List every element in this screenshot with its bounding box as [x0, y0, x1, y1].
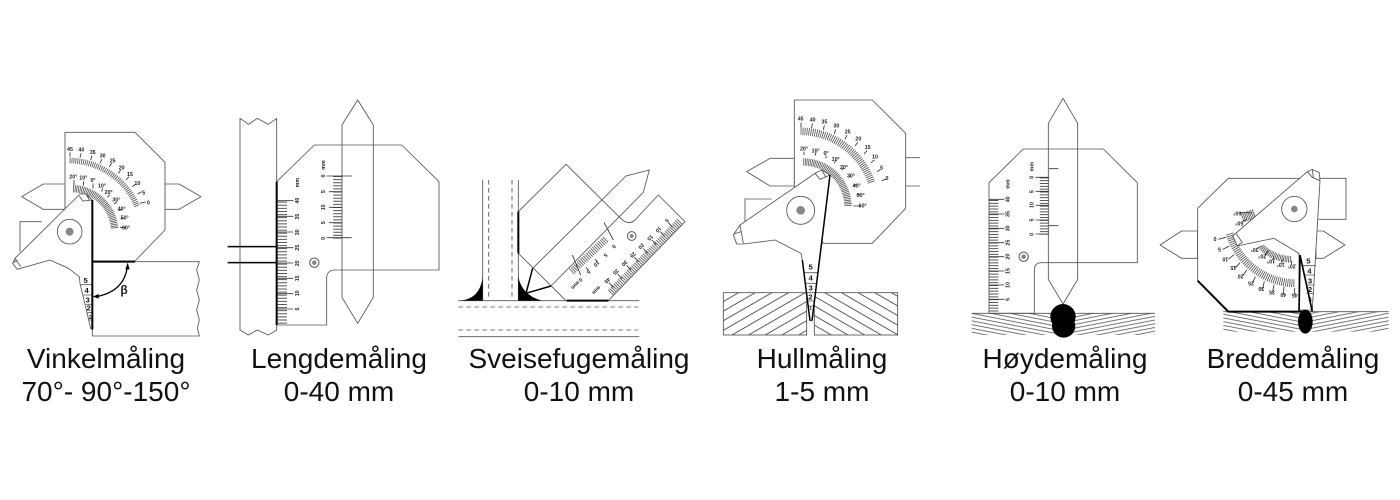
- left ruler numbers: 40: [1005, 196, 1011, 202]
- sliding blade: [342, 100, 373, 323]
- left ruler long ticks: [989, 199, 1004, 299]
- left ruler numbers: 25: [295, 245, 301, 251]
- scale numbers: [67, 147, 150, 231]
- wedge numbers: 1: [1309, 296, 1312, 301]
- left ruler long ticks: [278, 201, 293, 309]
- scale numbers: 10°: [812, 148, 820, 154]
- scale numbers: 10: [1222, 255, 1228, 261]
- left ruler numbers: 10: [1005, 282, 1011, 288]
- left ruler numbers: 5: [295, 307, 301, 310]
- panel: Sveisefugemåling: [458, 164, 690, 407]
- scale numbers: 45: [798, 117, 804, 123]
- outer degree scale: [70, 160, 137, 207]
- left ruler numbers: [1005, 179, 1011, 301]
- wedge numbers: [84, 276, 92, 321]
- screw head: [1291, 206, 1298, 212]
- scale numbers: 5: [142, 190, 145, 196]
- scale tick marks: [70, 152, 146, 227]
- left ruler numbers: [295, 178, 301, 310]
- workpiece left: [972, 313, 1063, 335]
- wedge numbers: 2: [87, 304, 91, 313]
- vertical plate centre lines: [489, 180, 512, 300]
- wedge numbers: [1306, 257, 1312, 301]
- right ruler numbers: 5: [1029, 218, 1035, 221]
- right pin: [906, 158, 920, 186]
- wedge numbers: 5: [1306, 257, 1311, 266]
- wedge numbers: 1: [89, 315, 92, 321]
- gauge body: [65, 132, 165, 261]
- outer degree scale: [801, 131, 872, 183]
- caption: 0-45 mm: [1238, 376, 1348, 407]
- left ruler numbers: 20: [295, 260, 301, 266]
- left ruler numbers: 40: [295, 198, 301, 204]
- inner ruler numbers: [569, 243, 617, 290]
- outer ruler numbers: 35: [611, 267, 620, 276]
- right ruler long ticks: [1036, 169, 1058, 234]
- scale numbers: 10: [872, 155, 878, 161]
- arm tip detail: [734, 170, 830, 243]
- wedge scale lines: [1303, 266, 1316, 301]
- left ruler ticks: [980, 200, 1008, 313]
- scale numbers: 30: [100, 154, 106, 160]
- scale numbers: 30°: [847, 174, 855, 180]
- right ruler numbers: 10: [1029, 202, 1035, 208]
- scale numbers: 40: [810, 118, 816, 124]
- panel: Lengdemåling: [228, 100, 439, 407]
- wedge numbers: 5: [809, 262, 814, 271]
- right ruler numbers: 10: [321, 204, 327, 210]
- scale numbers: 10°: [79, 176, 87, 182]
- right ruler ticks: [1031, 177, 1058, 235]
- right ruler numbers: 5: [1029, 190, 1035, 193]
- hidden scale fragment: [1242, 213, 1255, 218]
- left ruler numbers: mm: [1005, 179, 1011, 189]
- workpiece left: [723, 293, 807, 335]
- right ruler numbers: [1029, 162, 1035, 236]
- left ruler numbers: 15: [295, 275, 301, 281]
- scale numbers: 10: [134, 181, 140, 187]
- contact edges: [92, 200, 135, 329]
- scale numbers: 0°: [823, 151, 829, 157]
- scale tick marks: [801, 123, 886, 206]
- scale numbers: 25: [1248, 279, 1254, 285]
- left ruler ticks: [268, 202, 296, 324]
- scale numbers: 10°: [1267, 258, 1275, 264]
- right ruler numbers: 0: [1029, 233, 1035, 236]
- wedge numbers: 5: [84, 276, 89, 285]
- right ruler numbers: mm: [1029, 162, 1035, 171]
- caption: 0-10 mm: [1010, 376, 1120, 407]
- caption: Høydemåling: [983, 343, 1147, 374]
- arm measuring edges: [802, 175, 830, 321]
- left ruler numbers: 25: [1005, 240, 1011, 246]
- diagram: weld seam gauge: [458, 164, 685, 337]
- workpiece right: [1305, 312, 1389, 332]
- scale numbers: 35: [90, 150, 96, 156]
- contact edge: [274, 182, 280, 325]
- outer ruler numbers: 40: [602, 276, 611, 284]
- arm tip detail: [13, 194, 92, 267]
- scale numbers: 50°: [1235, 219, 1243, 225]
- left ruler numbers: 10: [295, 290, 301, 296]
- scale numbers: 20: [855, 137, 861, 143]
- wedge numbers: 3: [809, 284, 813, 293]
- right ruler long ticks: [327, 176, 352, 238]
- scale numbers: 20°: [1258, 253, 1266, 259]
- scale numbers: 40°: [118, 206, 126, 212]
- left ruler numbers: 15: [1005, 268, 1011, 274]
- inner ruler ticks: [572, 238, 607, 272]
- scale numbers: 45: [67, 147, 73, 153]
- scale numbers: 50°: [857, 193, 865, 199]
- swing arm: [13, 194, 92, 329]
- outer ruler numbers: 25: [628, 250, 637, 259]
- caption: 0-10 mm: [524, 376, 634, 407]
- workpiece left: [1223, 312, 1305, 332]
- scale numbers: 20°: [840, 165, 848, 171]
- left ruler numbers: mm: [295, 178, 301, 187]
- scale numbers: 30°: [1251, 246, 1259, 252]
- scale numbers: [1213, 209, 1298, 298]
- horizontal plate: [458, 301, 639, 337]
- arm measuring edges: [1299, 255, 1312, 312]
- scale numbers: 20: [119, 165, 125, 171]
- right ruler numbers: 5: [321, 221, 327, 224]
- contact edges: [518, 212, 608, 301]
- wedge scale lines: [81, 285, 92, 320]
- scale numbers: 20°: [800, 147, 808, 153]
- rivet: [310, 258, 319, 267]
- left pin: [22, 184, 65, 209]
- scale numbers: 30: [833, 123, 839, 129]
- scale numbers: 25: [110, 158, 116, 164]
- scale tick marks: [1218, 213, 1295, 294]
- right ruler numbers: 0: [1029, 176, 1035, 179]
- panel: Hullmåling: [723, 100, 920, 407]
- scale numbers: 40: [78, 148, 84, 154]
- scale numbers: 30: [1258, 285, 1264, 291]
- diagram: length measurement gauge: [228, 100, 439, 335]
- beta angle arc: β: [120, 283, 128, 297]
- scale numbers: 5: [880, 165, 883, 171]
- wedge numbers: 4: [1307, 266, 1312, 275]
- screw head: [66, 228, 74, 236]
- outer ruler numbers: 15: [645, 233, 654, 242]
- right ruler ticks: [324, 176, 351, 239]
- gauge body: [989, 149, 1137, 313]
- right ruler numbers: mm: [321, 160, 327, 170]
- left ruler numbers: 35: [1005, 211, 1011, 217]
- scale numbers: 20°: [1288, 263, 1296, 269]
- inner ruler long ticks: [572, 222, 613, 275]
- weld bead: [1298, 310, 1313, 334]
- arm tip detail: [1233, 169, 1320, 246]
- left pin: [1160, 231, 1198, 258]
- measured lines: [228, 247, 277, 263]
- left ruler numbers: 20: [1005, 254, 1011, 260]
- left ruler numbers: 30: [295, 229, 301, 235]
- pivot screw: [1282, 196, 1307, 222]
- inner ruler numbers: 0: [610, 243, 617, 249]
- wedge numbers: [808, 262, 814, 310]
- scale numbers: 0: [1213, 235, 1216, 241]
- inner degree scale: [1261, 247, 1292, 259]
- scale numbers: 0°: [90, 178, 96, 184]
- sliding blade: [1048, 98, 1078, 304]
- scale numbers: 10°: [832, 157, 840, 163]
- workpiece top line: [972, 312, 1155, 315]
- outer ruler numbers: 20: [636, 241, 645, 250]
- scale numbers: 45: [1292, 292, 1298, 298]
- sliding blade: [533, 170, 649, 286]
- caption: Sveisefugemåling: [468, 343, 690, 374]
- inner ruler numbers: 5: [602, 252, 608, 258]
- outer degree scale: [1230, 234, 1295, 283]
- panel: Høydemåling: [972, 98, 1155, 407]
- scale numbers: 35: [821, 119, 827, 125]
- wedge numbers: 2: [808, 293, 812, 302]
- scale numbers: 60°: [1233, 209, 1241, 215]
- outer ruler ticks: [610, 221, 680, 293]
- outer ruler numbers: 30: [620, 258, 628, 267]
- gauge body: [277, 145, 439, 325]
- screw head: [796, 206, 805, 215]
- workpiece right: [814, 293, 898, 335]
- rear slide: [1317, 178, 1346, 219]
- caption: Breddemåling: [1207, 343, 1379, 374]
- inner ruler numbers: 10: [592, 259, 600, 268]
- inner ruler numbers: mm: [569, 279, 580, 290]
- weld fillet right: [518, 277, 542, 301]
- scale numbers: 30°: [112, 198, 120, 204]
- right pin: [1316, 231, 1345, 258]
- outer ruler numbers: 10: [654, 225, 662, 233]
- contact edges: [1198, 281, 1305, 312]
- left ruler numbers: 35: [295, 214, 301, 220]
- wedge numbers: 3: [86, 295, 90, 304]
- outer ruler numbers: 5: [663, 217, 670, 223]
- gauge body: [1198, 178, 1317, 312]
- inner ruler numbers: 5: [585, 268, 591, 275]
- scale numbers: 50°: [121, 216, 129, 222]
- swing arm: [733, 170, 830, 321]
- scale numbers: 60°: [122, 225, 130, 231]
- scale numbers: 20°: [69, 174, 77, 180]
- horizontal plate dashed lines: [458, 307, 638, 330]
- scale numbers: 40°: [853, 183, 861, 189]
- caption: 0-40 mm: [284, 376, 394, 407]
- weld fillet left: [458, 277, 483, 301]
- inner ruler numbers: 0: [577, 276, 583, 283]
- left ruler numbers: 5: [1005, 298, 1011, 301]
- outer ruler long ticks: [609, 223, 673, 287]
- diagram: gap measurement gauge: [723, 100, 920, 335]
- wedge numbers: 4: [809, 273, 814, 282]
- rivet: [627, 232, 636, 240]
- outer ruler numbers: [590, 217, 670, 295]
- right ruler numbers: 0: [321, 237, 327, 240]
- scale numbers: 15: [1230, 264, 1236, 270]
- scale numbers: 0: [886, 176, 889, 182]
- diagram: height measurement gauge: [972, 98, 1155, 338]
- left ruler numbers: 30: [1005, 225, 1011, 231]
- right ruler numbers: 5: [321, 190, 327, 193]
- scale numbers: 60°: [859, 204, 867, 210]
- scale numbers: 35: [1269, 289, 1275, 295]
- wedge scale lines: [804, 273, 818, 306]
- scale numbers: 25: [845, 129, 851, 135]
- rear slide: [20, 222, 42, 252]
- wedge numbers: 2: [1308, 285, 1312, 294]
- inner degree scale: [803, 162, 848, 206]
- workpiece right: [1063, 313, 1155, 335]
- right ruler numbers: [321, 160, 327, 240]
- gauge body: [794, 100, 906, 243]
- wedge numbers: 3: [1308, 276, 1312, 285]
- caption: 1-5 mm: [775, 376, 869, 407]
- gauge body: [518, 164, 685, 301]
- scale numbers: 15: [865, 145, 871, 151]
- diagram: angle measurement gauge: [13, 132, 201, 336]
- pivot screw: [57, 219, 82, 244]
- blade contact lines: [526, 268, 551, 293]
- diagram: width measurement gauge: [1160, 169, 1389, 334]
- caption: 70°- 90°-150°: [21, 376, 191, 407]
- scale numbers: 40: [1280, 291, 1286, 297]
- caption: Vinkelmåling: [27, 343, 185, 374]
- left pin: [747, 158, 794, 186]
- panel: Breddemåling: [1160, 169, 1389, 407]
- beta angle arc: [93, 263, 130, 299]
- wedge numbers: 4: [85, 286, 90, 295]
- scale numbers: [798, 117, 889, 210]
- outer ruler numbers: mm: [590, 284, 601, 295]
- swing arm: [1233, 169, 1320, 310]
- weld bead: [1050, 304, 1076, 338]
- panel: Vinkelmåling: [13, 132, 201, 407]
- scale numbers: 10°: [1277, 261, 1285, 267]
- vertical plate: [483, 180, 518, 301]
- inner degree scale: [73, 189, 115, 229]
- scale numbers: 20: [1238, 272, 1244, 278]
- scale numbers: 10°: [98, 184, 106, 190]
- scale numbers: 5: [1218, 245, 1221, 251]
- wedge numbers: 1: [809, 305, 812, 310]
- workpiece: [92, 262, 199, 336]
- scale numbers: 0: [147, 200, 150, 206]
- caption: Lengdemåling: [251, 343, 427, 374]
- pivot screw: [787, 196, 815, 224]
- rivet: [1019, 252, 1028, 261]
- right ruler numbers: 0: [321, 174, 327, 177]
- scale numbers: 20°: [105, 190, 113, 196]
- workpiece top line: [1223, 310, 1389, 313]
- rear slide: [745, 199, 772, 225]
- right pin: [165, 184, 201, 209]
- scale numbers: 15: [127, 172, 133, 178]
- plate being measured: [240, 118, 277, 335]
- caption: Hullmåling: [757, 343, 887, 374]
